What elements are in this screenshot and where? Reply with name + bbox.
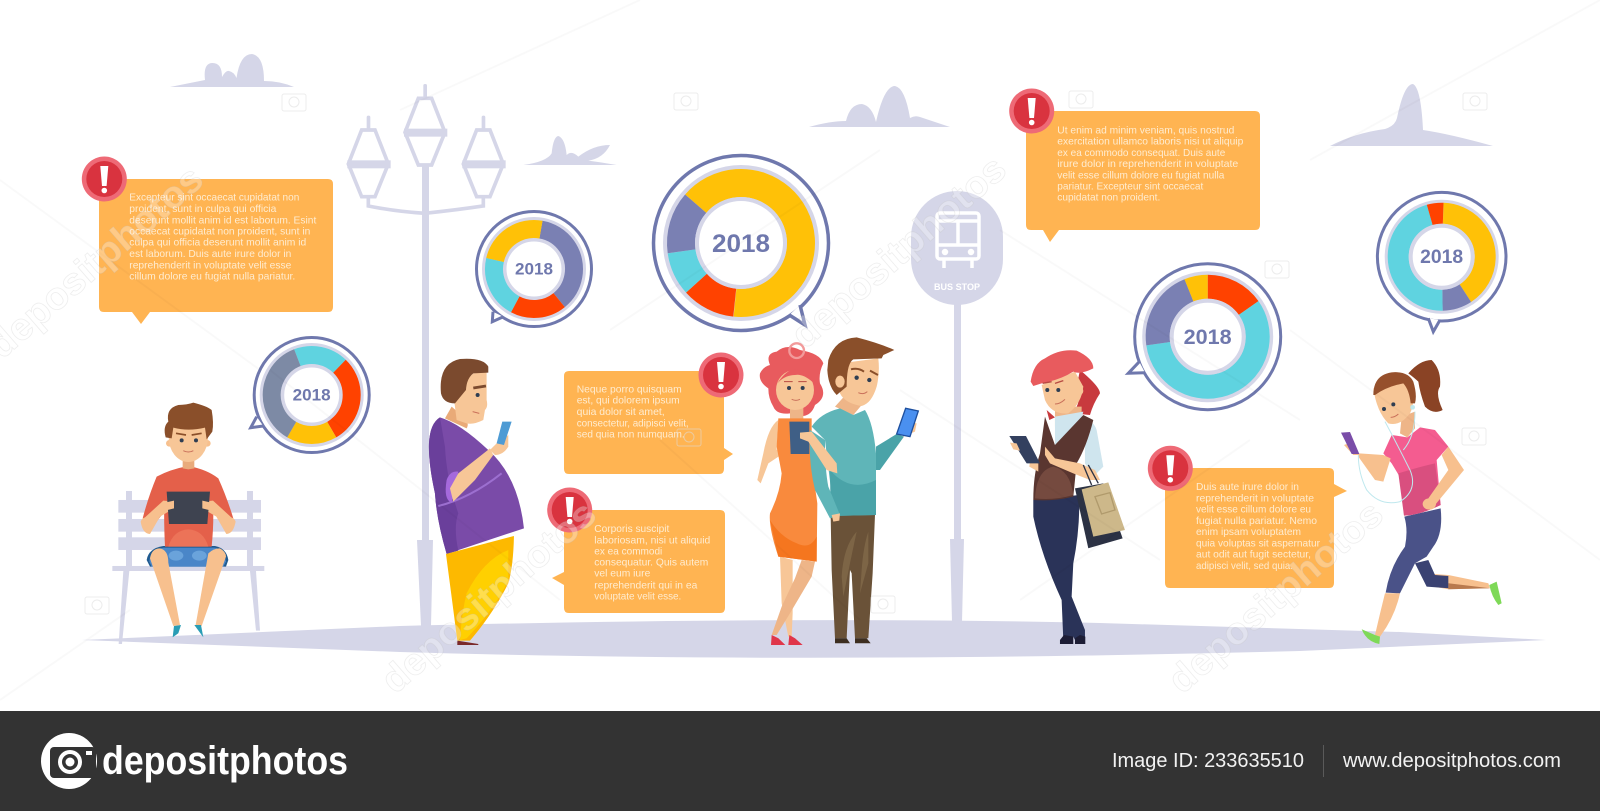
text block: Neque porro quisquam xyxy=(577,385,682,396)
cloud 2 xyxy=(523,136,617,165)
text block: deserunt mollit anim id est laborum. Esint xyxy=(129,215,316,226)
cloud 3 xyxy=(809,86,950,127)
boy xyxy=(141,403,236,637)
panel: callout middle upper xyxy=(564,352,744,474)
ground shadow xyxy=(82,620,1546,658)
text block: culpa qui officia deserunt mollit anim id xyxy=(129,238,307,249)
panel: callout top right xyxy=(1009,88,1260,242)
text block: reprehenderit in voluptate xyxy=(1196,493,1314,504)
text block: laboriosam, nisi ut aliquid xyxy=(594,535,711,546)
text block: quia voluptas sit aspernatur xyxy=(1196,538,1321,549)
couple xyxy=(757,337,918,645)
donut chart bubble: far right: 2018 xyxy=(1420,247,1463,268)
cloud 4 xyxy=(1330,84,1493,146)
text block: cillum dolore eu fugiat nulla pariatur. xyxy=(129,271,295,282)
bus stop sign xyxy=(911,191,1003,622)
text block: est laborum. Duis aute irure dolor in xyxy=(129,249,292,260)
icon: alert badge xyxy=(547,488,592,532)
text block: ex ea commodo consequat. Duis aute xyxy=(1057,148,1226,159)
text block: vel eum iure xyxy=(594,569,651,580)
text block: irure dolor in reprehenderit in voluptate xyxy=(1057,159,1239,170)
donut chart bubble: large centre xyxy=(654,156,828,330)
text block: aut odit aut fugit sectetur, xyxy=(1196,550,1311,561)
donut chart bubble: small centre xyxy=(476,212,592,326)
woman in orange dress xyxy=(757,343,823,645)
panel: callout lower right xyxy=(1148,446,1347,588)
website url: www.depositphotos.com xyxy=(1342,750,1561,772)
text block xyxy=(129,193,316,282)
donut chart bubble: large centre: 2018 xyxy=(712,230,770,258)
text block: voluptate velit esse. xyxy=(594,591,681,602)
text block: enim ipsam voluptatem xyxy=(1196,527,1301,538)
icon: bus xyxy=(937,213,979,268)
image id: Image ID: 233635510 xyxy=(1112,750,1304,772)
bench xyxy=(112,491,264,644)
watermark overlay: depositphotos xyxy=(783,148,1015,357)
jogger with earphones xyxy=(1341,360,1502,644)
text block: fugiat nulla pariatur. Nemo xyxy=(1196,516,1317,527)
icon: alert badge xyxy=(82,156,127,202)
text block xyxy=(1196,482,1321,572)
text block: proident, sunt in culpa qui officia xyxy=(129,204,277,215)
bus stop sign: BUS STOP xyxy=(934,282,980,292)
text block: Corporis suscipit xyxy=(594,524,669,535)
text block: consequatur. Quis autem xyxy=(594,558,708,569)
icon: alert badge xyxy=(1009,88,1054,134)
text block: Ut enim ad minim veniam, quis nostrud xyxy=(1057,125,1235,136)
text block: consectetur, adipisci velit, xyxy=(577,418,689,429)
man in teal sweater xyxy=(810,337,918,643)
text block: velit esse cillum dolore eu xyxy=(1196,505,1311,516)
donut chart bubble: boy xyxy=(251,338,369,452)
text block: cupidatat non proident. xyxy=(1057,193,1160,204)
icon: alert badge xyxy=(698,352,744,398)
donut chart bubble: far right xyxy=(1377,192,1506,332)
text block: adipisci velit, sed quia. xyxy=(1196,561,1293,572)
donut chart bubble: right middle: 2018 xyxy=(1184,326,1232,349)
text block: est, qui dolorem ipsum xyxy=(577,396,680,407)
panel: callout middle lower xyxy=(547,488,725,613)
text block: reprehenderit qui in ea xyxy=(594,580,698,591)
bench and seated boy xyxy=(112,403,264,644)
text block: Excepteur sint occaecat cupidatat non xyxy=(129,193,300,204)
street lamp xyxy=(347,84,506,626)
woman's arm on tablet xyxy=(800,432,837,473)
watermark overlay: depositphotos xyxy=(373,493,605,702)
text block: ex ea commodi xyxy=(594,547,662,558)
panel: callout top left xyxy=(82,156,333,324)
text block: pariatur. Excepteur sint occaecat xyxy=(1057,181,1203,192)
donut chart bubble: right middle xyxy=(1128,264,1281,410)
text block: exercitation ullamco laboris nisi ut aliquip xyxy=(1057,137,1244,148)
text block xyxy=(577,385,689,441)
cloud 1 xyxy=(170,54,294,87)
logo wordmark: depositphotos xyxy=(102,739,348,783)
donut chart bubble: boy: 2018 xyxy=(293,386,331,404)
icon: alert badge xyxy=(1148,446,1193,491)
text block: velit esse cillum dolore eu fugiat nulla xyxy=(1057,170,1225,181)
text block: Duis aute irure dolor in xyxy=(1196,482,1299,493)
text block: sed quia non numquam. xyxy=(577,430,685,441)
text block xyxy=(594,524,711,602)
donut chart bubble: small centre: 2018 xyxy=(515,260,553,278)
logo: camera xyxy=(41,733,97,789)
woman with shopping bags xyxy=(1009,350,1125,644)
footer bar xyxy=(0,711,1600,811)
text block: occaecat cupidatat non proident, sunt in xyxy=(129,227,311,238)
text block: quia dolor sit amet, xyxy=(577,407,665,418)
text block: reprehenderit in voluptate velit esse xyxy=(129,260,292,271)
text block xyxy=(1057,125,1244,204)
watermark overlay: depositphotos xyxy=(1160,493,1392,702)
fat man with phone xyxy=(429,359,524,645)
